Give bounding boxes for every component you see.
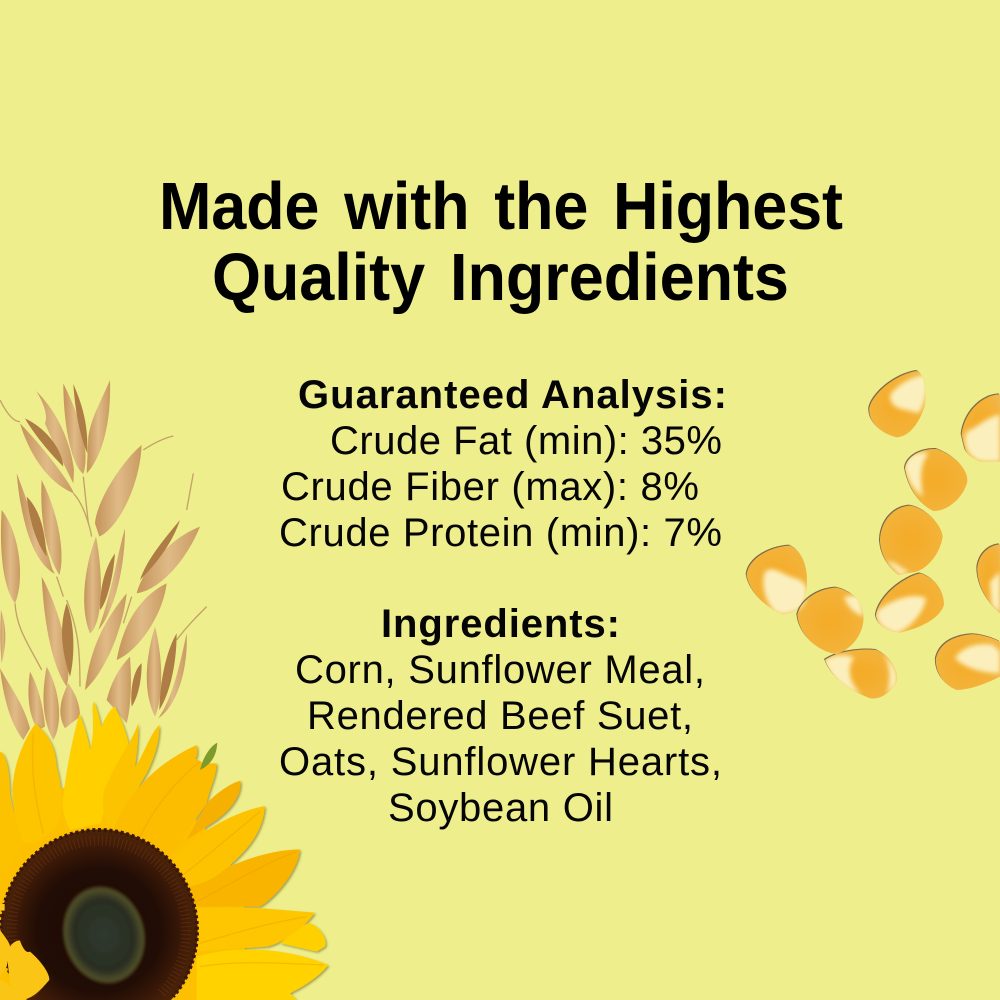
text block: guaranteed analysis: Guaranteed Analysis: xyxy=(298,373,727,417)
illustration: sunflower xyxy=(0,702,328,1000)
title: Made with the Highest xyxy=(159,168,843,243)
title xyxy=(159,168,843,314)
icon: sunflower centre xyxy=(51,876,157,994)
text block: guaranteed analysis: Crude Protein (min): 7% xyxy=(279,511,722,555)
text block: ingredients: Soybean Oil xyxy=(388,786,613,830)
text block: ingredients: Corn, Sunflower Meal, xyxy=(295,648,705,692)
petals xyxy=(0,702,328,1000)
illustration: oat stalks xyxy=(0,380,207,740)
small lower-left petals xyxy=(0,904,49,1000)
icon: leaf xyxy=(200,743,217,770)
title: Quality Ingredients xyxy=(212,239,789,314)
illustration: corn kernels xyxy=(747,371,1000,699)
icon: sunflower disk xyxy=(0,829,198,1000)
text block: ingredients xyxy=(279,602,722,830)
text block: ingredients: Ingredients: xyxy=(381,602,620,646)
text block: ingredients: Oats, Sunflower Hearts, xyxy=(279,740,722,784)
text block: ingredients: Rendered Beef Suet, xyxy=(307,694,693,738)
text block: guaranteed analysis: Crude Fat (min): 35% xyxy=(330,419,722,463)
text block: guaranteed analysis: Crude Fiber (max): 8% xyxy=(281,465,699,509)
text block: guaranteed analysis xyxy=(279,373,727,555)
